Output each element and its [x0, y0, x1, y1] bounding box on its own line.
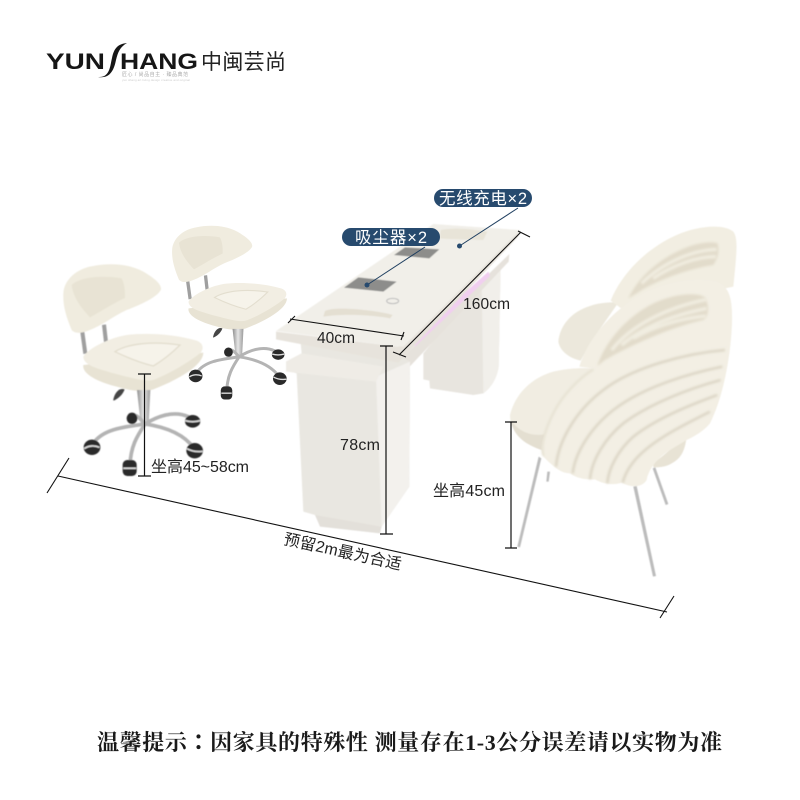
stool back posts	[80, 324, 108, 354]
back chair shell	[611, 227, 736, 310]
dust collector vent near	[344, 277, 397, 292]
table rear pedestal	[423, 265, 501, 395]
logo: YUNSHANG 中闽芸尚: YUN	[46, 49, 105, 74]
front pedestal side	[376, 362, 410, 527]
rear stool backrest	[172, 226, 252, 282]
armchairs	[510, 227, 736, 577]
label: 78cm: 78cm	[340, 437, 380, 454]
callout: dust collector	[342, 228, 440, 288]
hand rest recess far	[440, 229, 487, 240]
back chair inner ribs	[642, 249, 717, 283]
caster rings	[84, 421, 203, 468]
shell left boundary shade	[542, 369, 593, 456]
rear stool lever	[213, 328, 222, 338]
rear stool cushion inset	[214, 290, 268, 309]
rear stool base	[197, 349, 279, 390]
dust collector vent far	[394, 247, 439, 258]
logo: YUNSHANG 中闽芸尚: 中闽芸尚	[201, 51, 286, 74]
rear stool cushion lower	[188, 298, 287, 330]
front pedestal foot	[315, 515, 382, 533]
dimension line: 2m clearance	[47, 458, 674, 618]
table top edge	[276, 230, 520, 363]
front chair seat	[510, 368, 597, 450]
back chair interior	[628, 242, 718, 298]
stool backrest	[63, 264, 161, 333]
dimension line: stool seat height	[138, 374, 151, 476]
label: 2m clearance: 预留2m最为合适	[282, 530, 403, 574]
logo: YUNSHANG 中闽芸尚: 匠心 / 尚品自主 · 臻品典范	[122, 71, 188, 78]
front chair interior	[597, 294, 708, 366]
front chair ribs	[556, 350, 725, 483]
dimension line: table height	[380, 346, 393, 534]
stool column	[137, 390, 150, 423]
label: chair seat height: 坐高45cm	[433, 482, 505, 500]
manicure table	[276, 224, 520, 533]
dimension: table depth 40cm	[288, 316, 404, 340]
rear stool tufted panel	[179, 236, 223, 269]
front stool	[63, 264, 203, 476]
rear stool column	[233, 329, 243, 356]
power button	[387, 298, 399, 304]
front chair shell	[542, 280, 732, 486]
callout: wireless charging	[434, 189, 532, 248]
table underside ledge	[398, 254, 509, 373]
logo: YUNSHANG 中闽芸尚	[46, 43, 286, 82]
front chair seat underside	[511, 420, 547, 450]
table top surface	[276, 224, 520, 347]
front pedestal ledge	[286, 353, 383, 382]
table front pedestal	[286, 343, 410, 527]
stool cushion lower	[83, 353, 203, 391]
rear caster rings	[189, 354, 286, 393]
rear stool cushion	[189, 283, 286, 321]
logo: YUNSHANG 中闽芸尚: yun shang art living design creative and original	[122, 78, 190, 82]
stool cushion inset	[115, 343, 180, 366]
callout: dust collector: 吸尘器×2	[355, 228, 427, 247]
label: 160cm: 160cm	[463, 296, 510, 313]
front chair inner ribs	[612, 299, 707, 350]
stool cushion	[83, 334, 203, 380]
front chair rear panel	[653, 437, 687, 467]
hand rest recess near	[323, 309, 393, 318]
rear stool	[172, 226, 287, 399]
logo: YUNSHANG 中闽芸尚: HANG	[120, 49, 198, 74]
dimension: table width 160cm	[393, 231, 530, 357]
back chair seat	[558, 302, 618, 361]
rear stool posts	[186, 275, 209, 299]
stool casters	[84, 413, 203, 476]
rear stool casters	[189, 348, 287, 399]
label: stool seat height: 坐高45~58cm	[151, 458, 249, 476]
stool tufted panel	[72, 277, 125, 317]
dimension line: chair seat height	[505, 422, 517, 548]
stool lever	[113, 389, 125, 401]
rear pedestal side	[482, 265, 501, 393]
footer note: 温馨提示：因家具的特殊性 测量存在1-3公分误差请以实物为准	[97, 725, 722, 757]
callout: wireless charging: 无线充电×2	[439, 189, 527, 208]
pink light strip	[412, 272, 490, 347]
stool base	[93, 414, 194, 465]
label: 40cm: 40cm	[317, 330, 355, 347]
chair legs	[517, 457, 668, 577]
